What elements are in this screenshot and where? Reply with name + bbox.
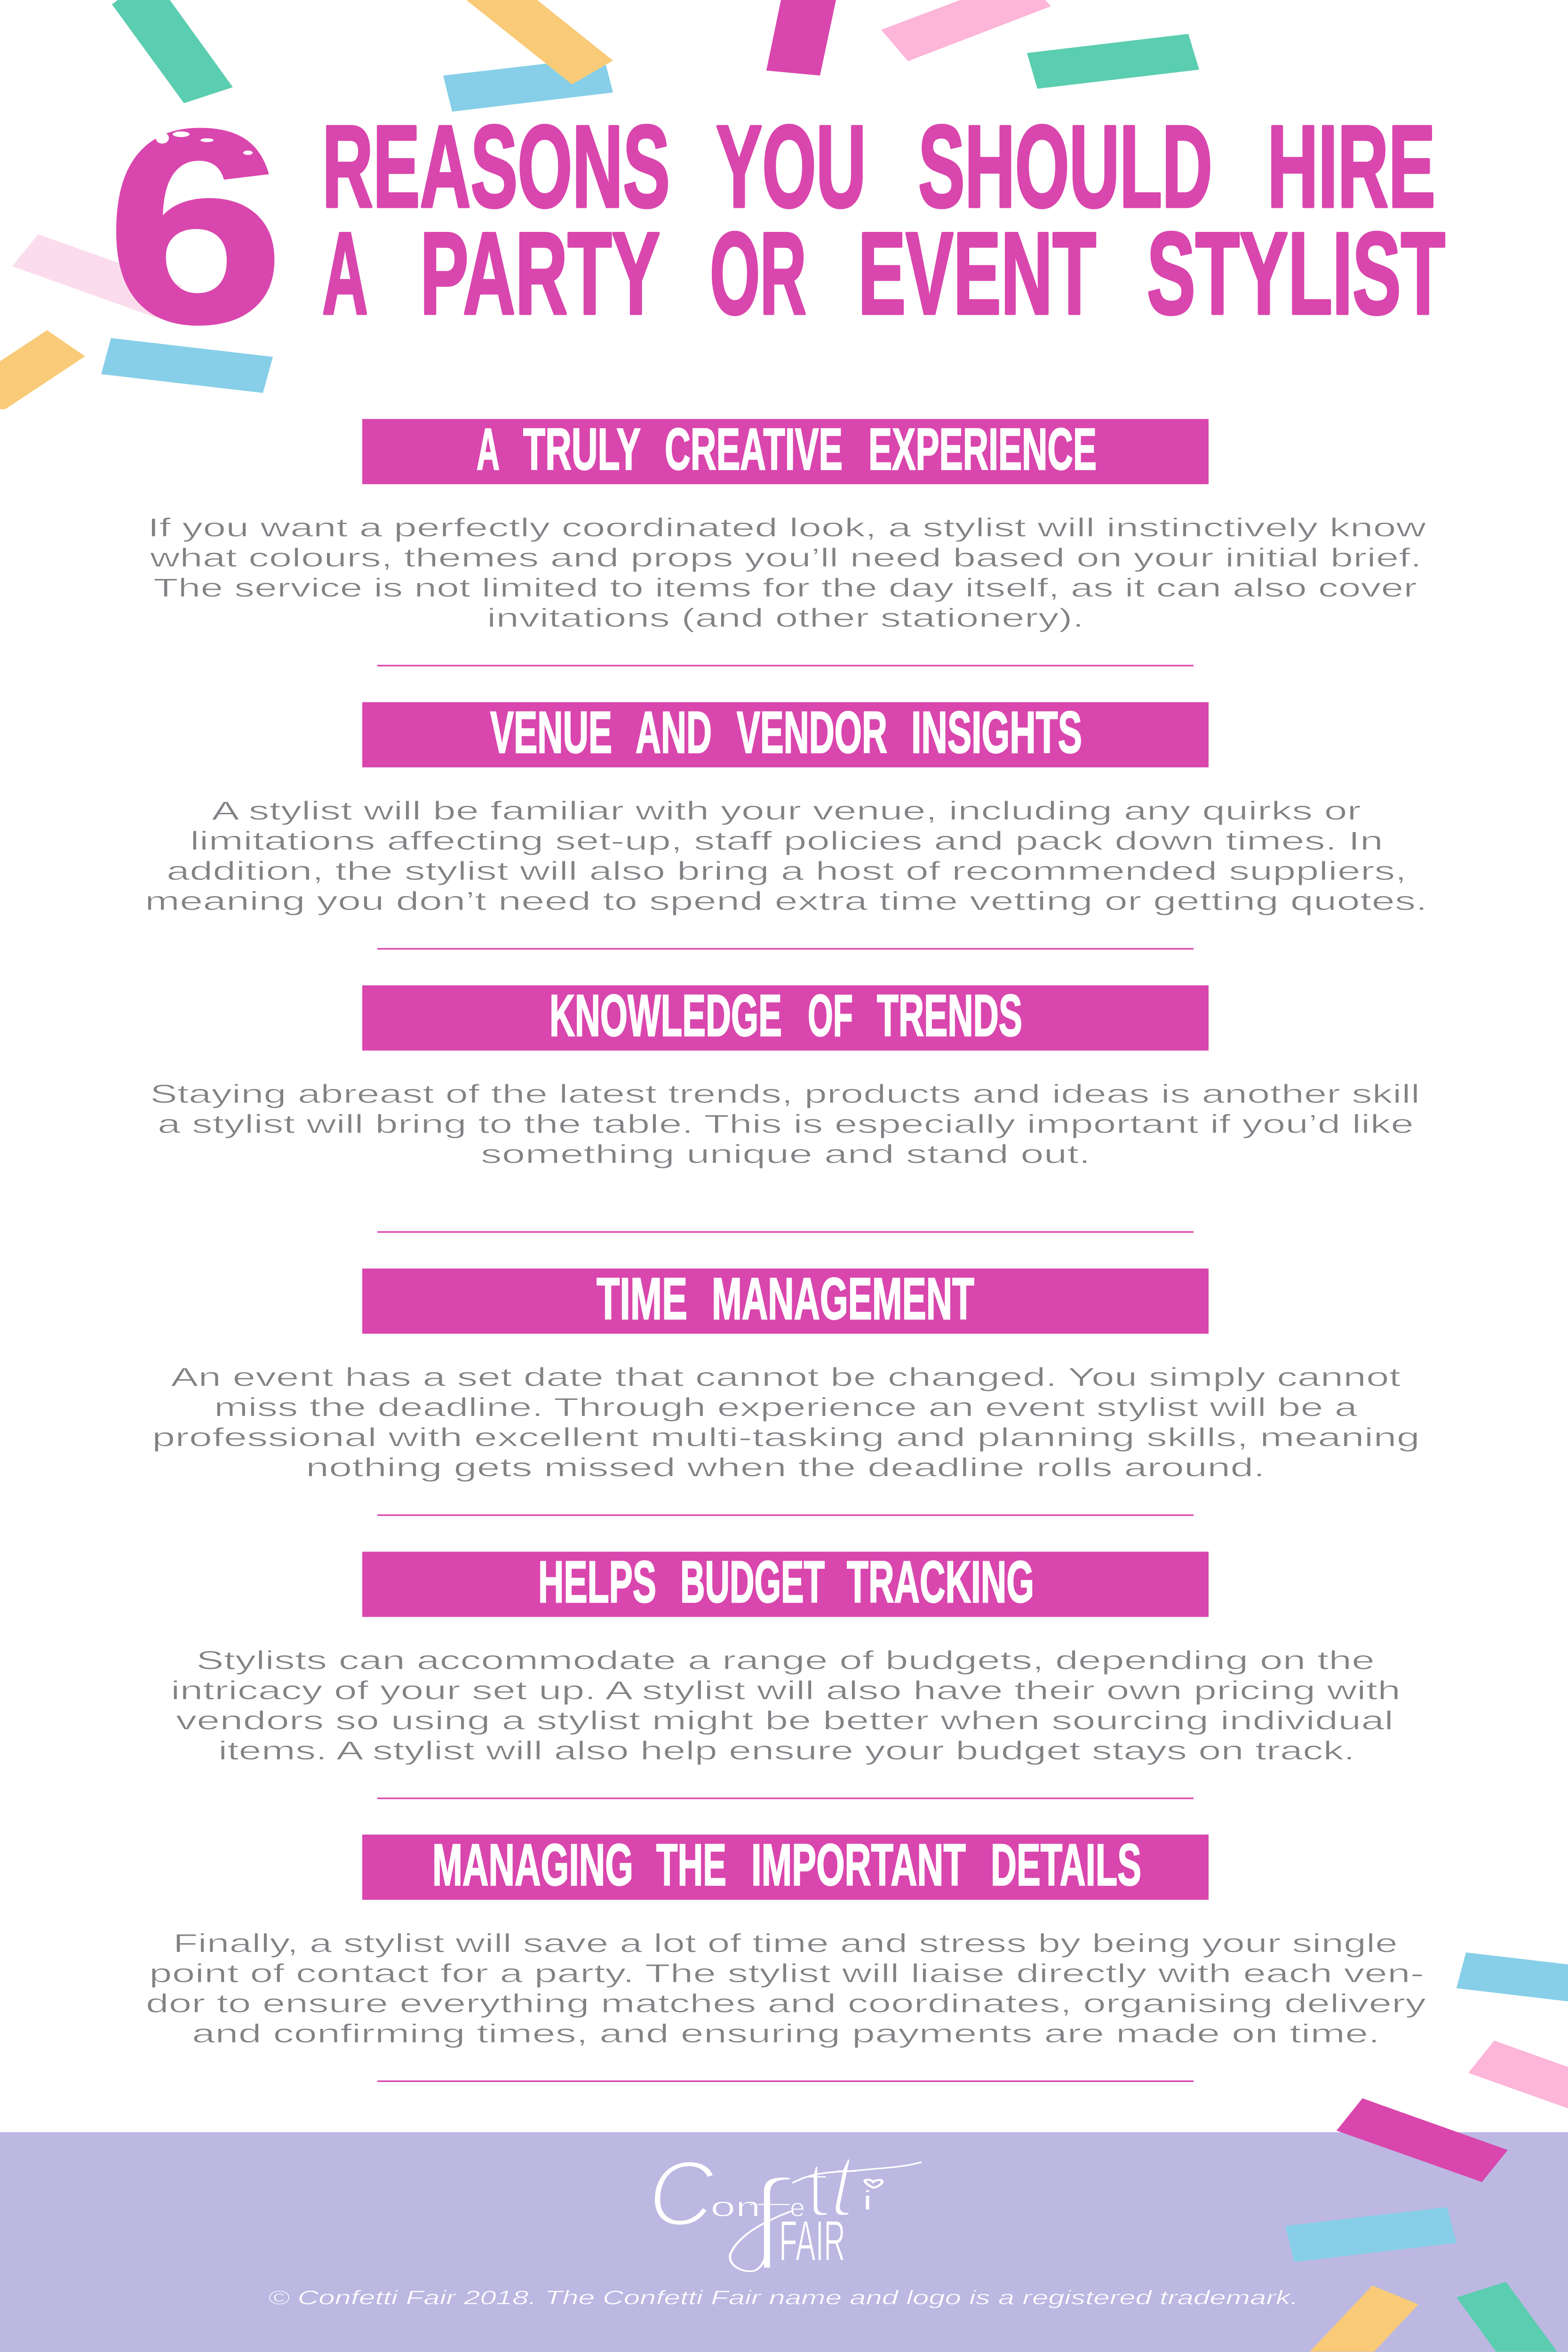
- panel: helps budget tracking: [171, 1549, 1401, 1799]
- title: A: [322, 208, 368, 338]
- body text 1: If you want a perfectly coordinated look, a stylist will instinctively know: [148, 513, 1426, 542]
- body text 3: Staying abreast of the latest trends, products and ideas is another skill: [150, 1079, 1420, 1109]
- heading 4: [597, 1265, 974, 1332]
- panel: managing the important details: DETAILS: [991, 1832, 1141, 1898]
- logo: Confetti Fair: on: [710, 2191, 761, 2222]
- body text 2: A stylist will be familiar with your venue, including any quirks or: [212, 796, 1361, 826]
- heading 6: THE: [656, 1832, 726, 1898]
- heading bar 6: [362, 1835, 1209, 1900]
- heading 3: KNOWLEDGE: [549, 982, 782, 1049]
- heading bar 2: [362, 702, 1209, 767]
- body text 6: point of contact for a party. The stylist will liaise directly with each ven-: [149, 1959, 1424, 1988]
- panel: knowledge of trends: [150, 982, 1420, 1233]
- heading 6: MANAGING: [432, 1832, 633, 1898]
- body text 5: intricacy of your set up. A stylist will also have their own pricing with: [171, 1676, 1401, 1705]
- body text 4: An event has a set date that cannot be changed. You simply cannot: [171, 1362, 1401, 1392]
- body text 5: vendors so using a stylist might be better when sourcing individual: [176, 1706, 1393, 1735]
- heading 1: A: [477, 416, 500, 482]
- body text 2: limitations affecting set-up, staff policies and pack down times. In: [190, 826, 1383, 856]
- confetti: bottom: [1285, 1953, 1568, 2352]
- heading 3: OF: [808, 982, 853, 1049]
- logo: Confetti Fair: i: [862, 2185, 873, 2216]
- logo: Confetti Fair: C: [648, 2142, 715, 2245]
- panel: a truly creative experience: EXPERIENCE: [868, 416, 1097, 482]
- panel: helps budget tracking: TRACKING: [847, 1549, 1034, 1615]
- body text 1: The service is not limited to items for the day itself, as it can also cover: [153, 573, 1417, 603]
- body text 6: [146, 1929, 1426, 2049]
- body text 4: [152, 1362, 1420, 1482]
- heading 5: HELPS: [538, 1549, 656, 1615]
- heading 1: [477, 416, 1097, 482]
- heading bar 4: [362, 1269, 1209, 1334]
- confetti: top: [0, 0, 1199, 409]
- logo: Confetti Fair: [648, 2134, 921, 2300]
- title: OR: [710, 208, 806, 338]
- title: EVENT: [858, 208, 1096, 338]
- title: PARTY: [420, 208, 660, 338]
- logo: Confetti Fair: t: [829, 2134, 860, 2236]
- logo: Confetti Fair: FAIR: [779, 2209, 845, 2273]
- heading bar 3: [362, 985, 1209, 1050]
- body text 6: and confirming times, and ensuring payments are made on time.: [192, 2019, 1380, 2049]
- body text 6: Finally, a stylist will save a lot of time and stress by being your single: [173, 1929, 1398, 1958]
- body text 1: what colours, themes and props you’ll need based on your initial brief.: [150, 543, 1422, 572]
- heading 4: TIME: [597, 1265, 687, 1332]
- body text 6: dor to ensure everything matches and coordinates, organising delivery: [146, 1989, 1426, 2018]
- body text 5: items. A stylist will also help ensure your budget stays on track.: [218, 1736, 1355, 1765]
- heading 1: TRULY: [523, 416, 641, 482]
- heading 2: VENUE: [490, 699, 612, 765]
- body text 4: miss the deadline. Through experience an event stylist will be a: [214, 1392, 1357, 1422]
- heading 2: [490, 699, 1082, 765]
- body text 4: professional with excellent multi-tasking and planning skills, meaning: [152, 1422, 1420, 1452]
- panel: time management: [152, 1265, 1420, 1516]
- body text 5: Stylists can accommodate a range of budgets, depending on the: [196, 1645, 1375, 1675]
- heading 2: AND: [636, 699, 712, 765]
- title: REASONS: [322, 101, 670, 231]
- body text 1: [148, 513, 1426, 633]
- heading bar 1: [362, 419, 1209, 484]
- logo: Confetti Fair: t: [805, 2144, 829, 2233]
- body text 3: [150, 1079, 1420, 1169]
- heading 6: IMPORTANT: [751, 1832, 966, 1898]
- body text 3: something unique and stand out.: [481, 1139, 1090, 1169]
- body text 3: a stylist will bring to the table. This is especially important if you’d like: [158, 1109, 1414, 1139]
- body text 2: [145, 796, 1427, 916]
- panel: managing the important details: [146, 1832, 1426, 2082]
- panel: time management: MANAGEMENT: [712, 1265, 974, 1332]
- footer band: [0, 2132, 1568, 2352]
- panel: knowledge of trends: TRENDS: [877, 982, 1022, 1049]
- title number 6: 6: [106, 73, 284, 380]
- heading 5: BUDGET: [680, 1549, 825, 1615]
- title: YOU: [716, 101, 866, 231]
- title: [322, 101, 1445, 338]
- logo: Confetti Fair: e: [790, 2193, 805, 2222]
- logo: Confetti Fair: f: [742, 2150, 795, 2300]
- body text 2: meaning you don’t need to spend extra time vetting or getting quotes.: [145, 886, 1427, 916]
- heading bar 5: [362, 1552, 1209, 1617]
- body text 4: nothing gets missed when the deadline rolls around.: [306, 1453, 1265, 1482]
- panel: a truly creative experience: [148, 416, 1426, 667]
- heading 6: [432, 1832, 1141, 1898]
- panel: venue and vendor insights: [145, 699, 1427, 950]
- body text 5: [171, 1645, 1401, 1765]
- heading 2: VENDOR: [737, 699, 887, 765]
- body text 1: invitations (and other stationery).: [487, 603, 1084, 633]
- copyright line: © Confetti Fair 2018. The Confetti Fair name and logo is a registered trademark.: [268, 2287, 1298, 2309]
- heading 1: CREATIVE: [665, 416, 843, 482]
- panel: venue and vendor insights: INSIGHTS: [911, 699, 1082, 765]
- heading 5: [538, 1549, 1034, 1615]
- body text 2: addition, the stylist will also bring a host of recommended suppliers,: [167, 856, 1407, 886]
